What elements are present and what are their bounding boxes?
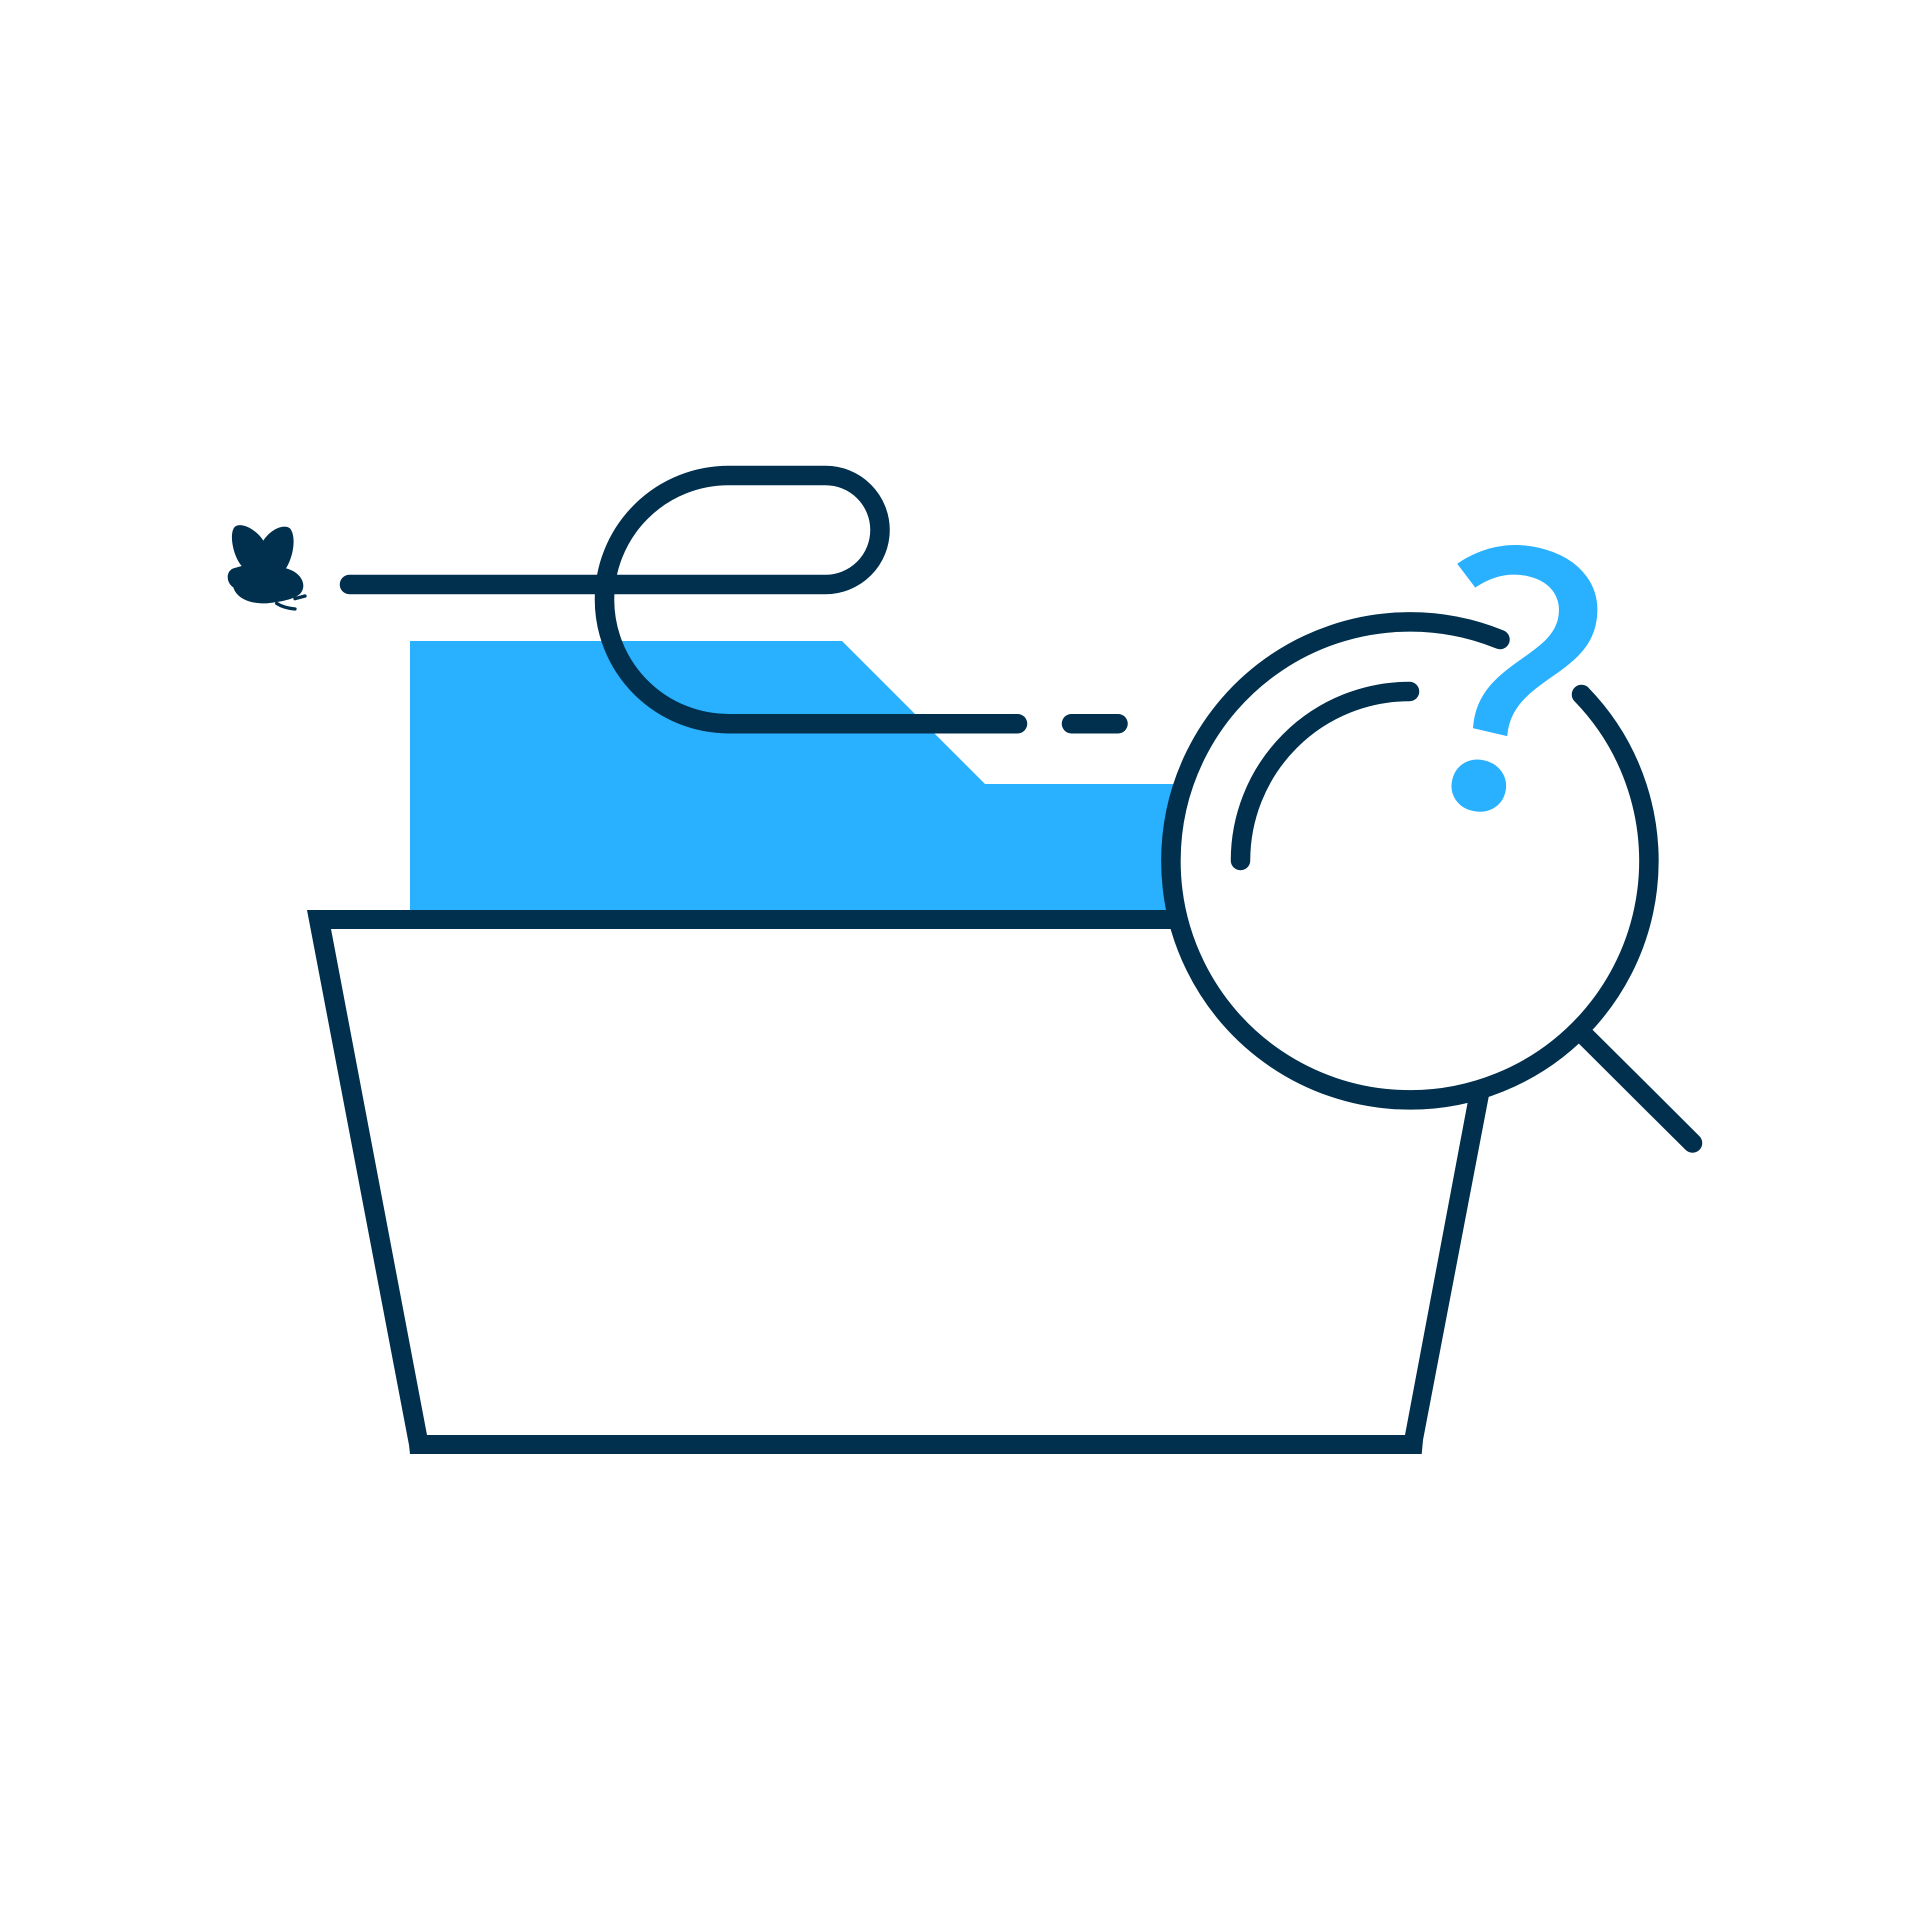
- icon: fly: [228, 525, 305, 609]
- dash after paperclip line: [1072, 714, 1118, 733]
- paperclip line: [350, 476, 1018, 724]
- folder back tab: [410, 641, 1260, 915]
- question mark: ?: [1370, 396, 1658, 924]
- fly body and wings: [228, 525, 303, 603]
- magnifier lens fill: [1170, 622, 1648, 1100]
- magnifying glass: [1170, 622, 1692, 1143]
- fly legs: [277, 596, 305, 609]
- folder front outline: [307, 910, 1490, 1454]
- lens highlight: [1240, 692, 1410, 860]
- magnifier ring: [1171, 622, 1649, 1100]
- magnifier handle: [1581, 1032, 1692, 1143]
